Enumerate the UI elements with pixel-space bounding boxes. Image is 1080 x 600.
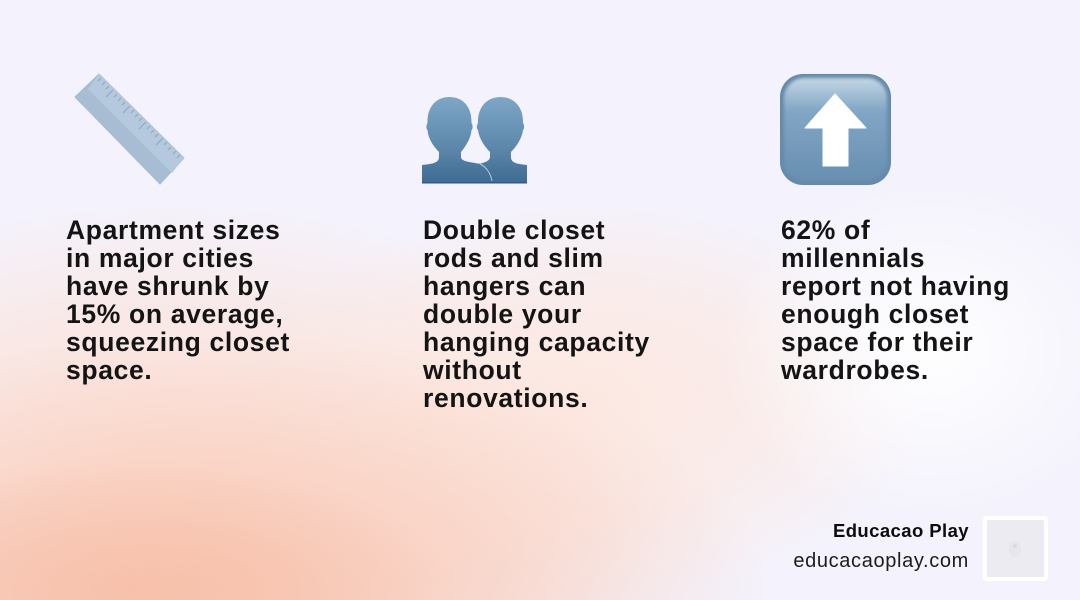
brand name: Educacao Play — [833, 520, 969, 541]
text: apartment sizes fact: space. — [66, 355, 152, 385]
text: closet rods fact: hangers can — [423, 271, 586, 301]
text: closet rods fact: double your — [423, 299, 582, 329]
icon: up arrow tile — [780, 74, 891, 185]
text: millennials fact — [780, 215, 1010, 385]
text: closet rods fact: renovations. — [423, 383, 588, 413]
text: millennials fact: enough closet — [781, 299, 969, 329]
text: millennials fact: 62% of — [781, 215, 870, 245]
text: apartment sizes fact: 15% on average, — [66, 299, 283, 329]
brand url: educacaoplay.com — [793, 550, 969, 572]
icon: two silhouettes — [422, 97, 527, 184]
text: millennials fact: space for their — [781, 327, 973, 357]
text: closet rods fact: Double closet — [423, 215, 605, 245]
text: closet rods fact — [422, 215, 650, 413]
text: closet rods fact: without — [423, 355, 522, 385]
text: apartment sizes fact: in major cities — [66, 243, 254, 273]
text: apartment sizes fact: Apartment sizes — [66, 215, 280, 245]
text: apartment sizes fact: have shrunk by — [66, 271, 270, 301]
text: millennials fact: report not having — [781, 271, 1010, 301]
logo tile — [983, 516, 1048, 581]
text: closet rods fact: rods and slim — [423, 243, 604, 273]
text: millennials fact: wardrobes. — [781, 355, 929, 385]
text: millennials fact: millennials — [781, 243, 925, 273]
text: apartment sizes fact — [66, 215, 290, 385]
text: closet rods fact: hanging capacity — [423, 327, 650, 357]
icon: ruler — [74, 74, 184, 184]
text: apartment sizes fact: squeezing closet — [66, 327, 290, 357]
